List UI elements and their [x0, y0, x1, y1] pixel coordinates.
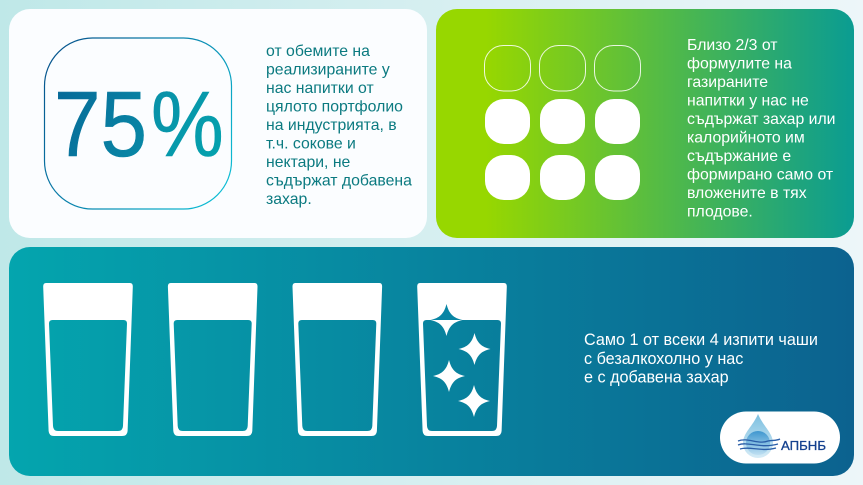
text block: formulas description: формулите на [687, 56, 792, 72]
text block: 75 percent description: от обемите на [266, 43, 370, 60]
panel: glasses [9, 247, 854, 476]
icon: glass 4 with bubbles [417, 283, 507, 436]
text block: formulas description: напитки у нас не [687, 92, 809, 110]
text block: 75 percent description: захар. [266, 191, 312, 208]
text block: 75 percent description: на индустрията, в [266, 117, 397, 134]
text block: formulas description: формирано само от [687, 166, 833, 184]
text block: 75 percent description: т.ч. сокове и [266, 135, 356, 152]
big number [54, 72, 224, 176]
text block: 75 percent description: нектари, не [266, 154, 351, 171]
icon: water drop [743, 414, 773, 458]
icon grid: nine rounded squares [484, 46, 640, 200]
text block: 75 percent description: съдържат добавена [266, 172, 412, 189]
big number: 75 [54, 72, 147, 176]
text block: glasses description: е с добавена захар [584, 368, 729, 386]
outlined rounded box [44, 38, 232, 209]
text block: 75 percent description: реализираните у [266, 61, 390, 78]
text block: formulas description: плодове. [687, 204, 753, 220]
panel: 75 percent [9, 9, 427, 238]
icon: glass 3 [292, 283, 382, 436]
text block: formulas description: вложените в тях [687, 185, 807, 202]
logo [720, 412, 840, 464]
big number: % [151, 72, 224, 176]
text block: 75 percent description: цялото портфолио [266, 98, 403, 115]
icon: glass 1 [43, 283, 133, 436]
panel: formulas [436, 9, 854, 238]
text block: formulas description: съдържание е [687, 148, 791, 165]
logo text: АПБНБ [781, 439, 826, 453]
text block: formulas description: газираните [687, 74, 768, 91]
text block: formulas description: съдържат захар или [687, 111, 836, 128]
text block: glasses description: с безалкохолно у нас [584, 350, 743, 368]
text block: 75 percent description: нас напитки от [266, 80, 374, 97]
text block: formulas description: Близо 2/3 от [687, 37, 778, 54]
icon: glass 2 [168, 283, 258, 436]
text block: formulas description: калорийното им [687, 130, 805, 146]
icon: waves [738, 439, 780, 449]
text block: glasses description: Само 1 от всеки 4 изпити чаши [584, 331, 818, 349]
